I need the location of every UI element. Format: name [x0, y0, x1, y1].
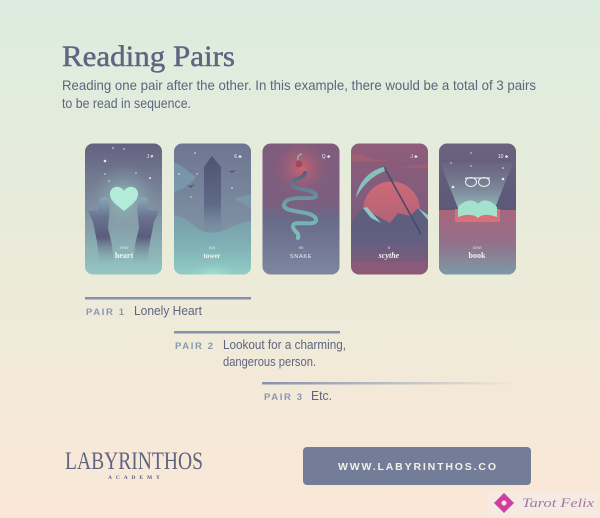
card 4: scythe: [351, 144, 428, 274]
pair 3: PAIR 3: [264, 392, 302, 403]
card name: X: [388, 245, 391, 250]
intro text: to be read in sequence.: [62, 95, 191, 111]
icon: tower: [204, 156, 221, 222]
pair 1: [85, 297, 251, 318]
icon: glasses: [465, 178, 490, 186]
card name: VII: [299, 245, 303, 250]
watermark: Tarot Felix: [488, 491, 597, 516]
icon: book: [455, 201, 500, 222]
icon: glowing heart: [110, 187, 138, 211]
card name: XIX: [209, 245, 216, 250]
logo: Labyrinthos Academy: [65, 448, 203, 481]
card 2: tower: [174, 144, 251, 289]
stars: [104, 147, 151, 182]
card name: XXIV: [119, 245, 129, 250]
card name: tower: [203, 252, 221, 260]
logo: Labyrinthos Academy: LABYRINTHOS: [65, 448, 203, 475]
icon: mountains: [351, 208, 428, 262]
card 1: heart: [85, 144, 162, 274]
button: website: [303, 447, 531, 485]
stars: [178, 152, 233, 198]
clouds: [351, 154, 392, 162]
intro text: Reading one pair after the other. In this example, there would be a total of 3 pairs: [62, 77, 536, 93]
icon: birds: [187, 170, 236, 188]
pair 2: Lookout for a charming,: [223, 338, 346, 352]
title: Reading Pairs: [62, 40, 235, 73]
card name: scythe: [378, 251, 400, 260]
pair 1: Lonely Heart: [134, 304, 203, 318]
suit label: 10 ♣: [498, 154, 509, 160]
card name: SNAKE: [290, 254, 312, 260]
button: website: WWW.LABYRINTHOS.CO: [338, 461, 496, 473]
watermark: Tarot Felix: Tarot Felix: [522, 495, 594, 510]
suit label: J ♣: [410, 154, 418, 160]
pair 3: Etc.: [311, 389, 332, 403]
card name: heart: [115, 251, 133, 260]
icon: snake: [284, 173, 316, 238]
card 5: book: [439, 144, 516, 275]
pair 2: [174, 331, 346, 369]
pair 2: dangerous person.: [223, 355, 316, 369]
logo: Labyrinthos Academy: ACADEMY: [108, 475, 160, 481]
clouds: [174, 163, 196, 192]
icon: lotus diamond: [494, 493, 514, 513]
icon: scythe: [356, 167, 421, 234]
icon: sun: [363, 182, 420, 223]
suit label: Q ♣: [322, 154, 331, 160]
icon: left hand: [88, 197, 113, 258]
card name: book: [469, 251, 486, 260]
card name: [204, 246, 220, 258]
pair 1: PAIR 1: [86, 307, 125, 318]
pair 3: [262, 382, 517, 403]
card name: [378, 246, 399, 260]
pair 2: PAIR 2: [175, 341, 213, 352]
card name: [115, 246, 134, 258]
suit label: J ♥: [147, 154, 153, 160]
icon: light beam: [442, 166, 512, 208]
icon: apple: [296, 160, 302, 168]
card name: XXVI: [472, 245, 482, 250]
icon: right hand: [134, 197, 159, 258]
suit label: 6 ♣: [234, 154, 242, 160]
intro text: [62, 77, 536, 111]
card name: [468, 246, 486, 258]
card name: [290, 246, 312, 258]
card 3: snake: [262, 138, 340, 274]
stars: [450, 152, 504, 188]
